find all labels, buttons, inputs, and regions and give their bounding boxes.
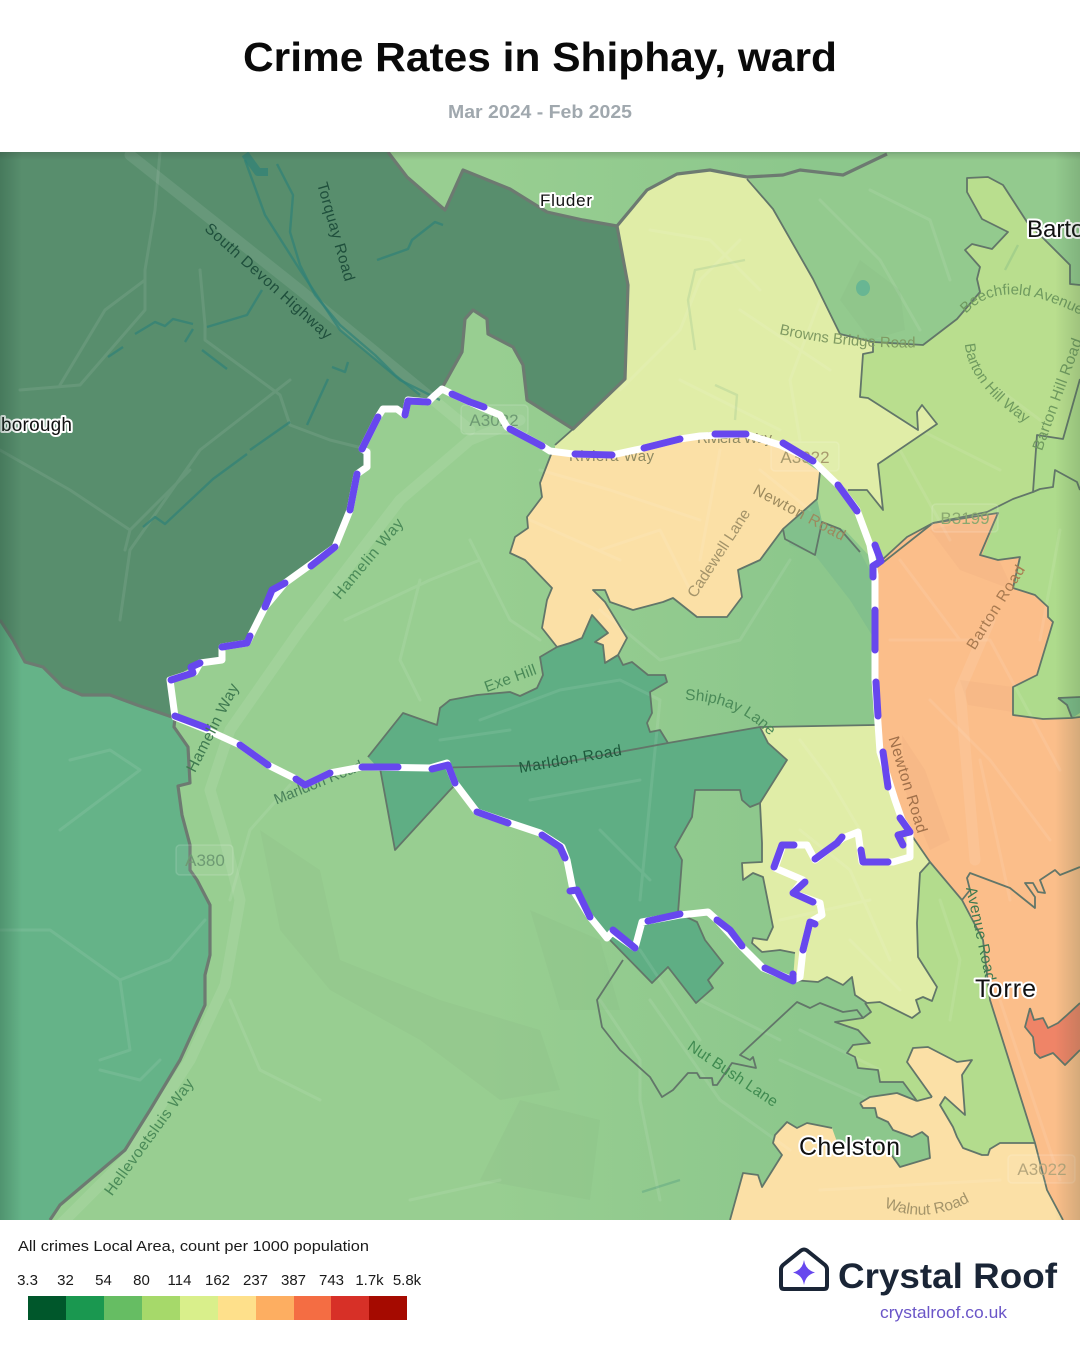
road labels under ward line: Riviera Way	[569, 448, 654, 465]
woodland shading	[260, 260, 905, 1200]
map labels: Cadewell Lane	[684, 506, 754, 601]
icon: house with star	[781, 1250, 827, 1289]
map labels: Hamelin Way	[183, 681, 243, 775]
area: dark green west hills	[0, 152, 628, 718]
subtitle: date range: Mar 2024 - Feb 2025	[448, 102, 632, 122]
legend title: All crimes Local Area, count per 1000 population	[18, 1238, 369, 1255]
legend scale values: 743	[319, 1272, 344, 1289]
road shields: A3022	[469, 411, 519, 430]
map labels: Newton Road	[885, 734, 930, 835]
map labels: Shiphay Lane	[686, 689, 774, 734]
road shields: A3022	[780, 448, 830, 467]
website url: crystalroof.co.uk	[880, 1304, 1008, 1322]
legend scale values: 162	[205, 1272, 230, 1289]
road labels under ward line: Marldon Road	[271, 757, 365, 808]
title: Crime Rates in Shiphay, ward	[243, 34, 837, 80]
place names: Fluder	[540, 191, 592, 210]
road shields: A380	[185, 851, 225, 870]
area: mid green south-west	[0, 620, 210, 1220]
water courses	[108, 154, 1018, 1192]
legend scale values: 80	[133, 1272, 150, 1289]
legend scale values: 237	[243, 1272, 268, 1289]
road labels under ward line: Riviera Way	[697, 430, 772, 447]
area: peach Chelston	[730, 1047, 1063, 1220]
map labels: Walnut Road	[887, 1192, 969, 1215]
area: Marldon Road darker green	[368, 615, 787, 1003]
area: darker orange patches	[981, 518, 997, 554]
legend scale values: 54	[95, 1272, 112, 1289]
road shields: A3022	[1017, 1160, 1067, 1179]
area: small wedge east	[1060, 698, 1080, 717]
area: right edge green	[980, 379, 1080, 719]
area: south yellow-green	[742, 725, 937, 1018]
map base area	[0, 152, 1080, 1220]
legend scale values: 5.8k	[393, 1272, 422, 1289]
legend scale values: 387	[281, 1272, 306, 1289]
legend	[17, 1238, 422, 1320]
legend scale values: 32	[57, 1272, 74, 1289]
area: north green	[747, 152, 1080, 345]
area: Barton light green	[844, 178, 1080, 558]
area: north yellow-green	[555, 170, 937, 510]
region boundaries	[0, 152, 1080, 1220]
map labels: South Devon Highway	[201, 220, 335, 343]
map labels: Barton Hill Way	[965, 344, 1030, 423]
logo: Crystal Roof	[781, 1250, 1057, 1322]
legend scale values: 3.3	[17, 1272, 38, 1289]
map labels: Torquay Road	[313, 180, 358, 283]
map labels: Browns Bridge Road	[780, 324, 915, 350]
legend scale values: 1.7k	[355, 1272, 384, 1289]
ward boundary: purple dashes	[171, 394, 910, 981]
legend scale values	[17, 1272, 422, 1289]
road labels under ward line	[271, 430, 772, 808]
place names: Chelston	[799, 1133, 900, 1161]
legend scale values: 114	[168, 1272, 191, 1289]
logo wordmark: Crystal Roof	[838, 1257, 1057, 1296]
area: strip by Newton Road	[818, 474, 868, 554]
ward boundary: white base line	[170, 389, 910, 980]
area: peach central	[510, 434, 820, 663]
map labels: Marldon Road	[518, 742, 623, 777]
map labels: Exe Hill	[482, 662, 539, 696]
road shields	[176, 405, 1075, 1183]
legend colour ramp	[28, 1296, 407, 1320]
area: red patch	[1025, 1003, 1080, 1065]
map labels: Avenue Road	[962, 885, 999, 983]
map labels: Nut Bush Lane	[684, 1038, 781, 1111]
map labels: Hamelin Way	[330, 515, 407, 603]
map labels: Newton Road	[750, 482, 848, 544]
place names: Torre	[975, 975, 1036, 1003]
map labels: Barton Road	[964, 562, 1029, 653]
map labels	[104, 182, 1080, 1215]
map labels: Hellevoetsluis Way	[101, 1076, 198, 1199]
area: strip darker	[783, 499, 875, 640]
panel: choropleth map	[0, 152, 1080, 1220]
area: orange Torre and Barton	[875, 513, 1080, 1220]
map edge vignette	[0, 152, 1080, 1220]
road shields: B3199	[940, 509, 990, 528]
place names: borough	[1, 415, 72, 436]
place names	[1, 191, 1080, 1161]
road network	[0, 152, 1060, 1225]
area: east light green	[835, 862, 1035, 1155]
